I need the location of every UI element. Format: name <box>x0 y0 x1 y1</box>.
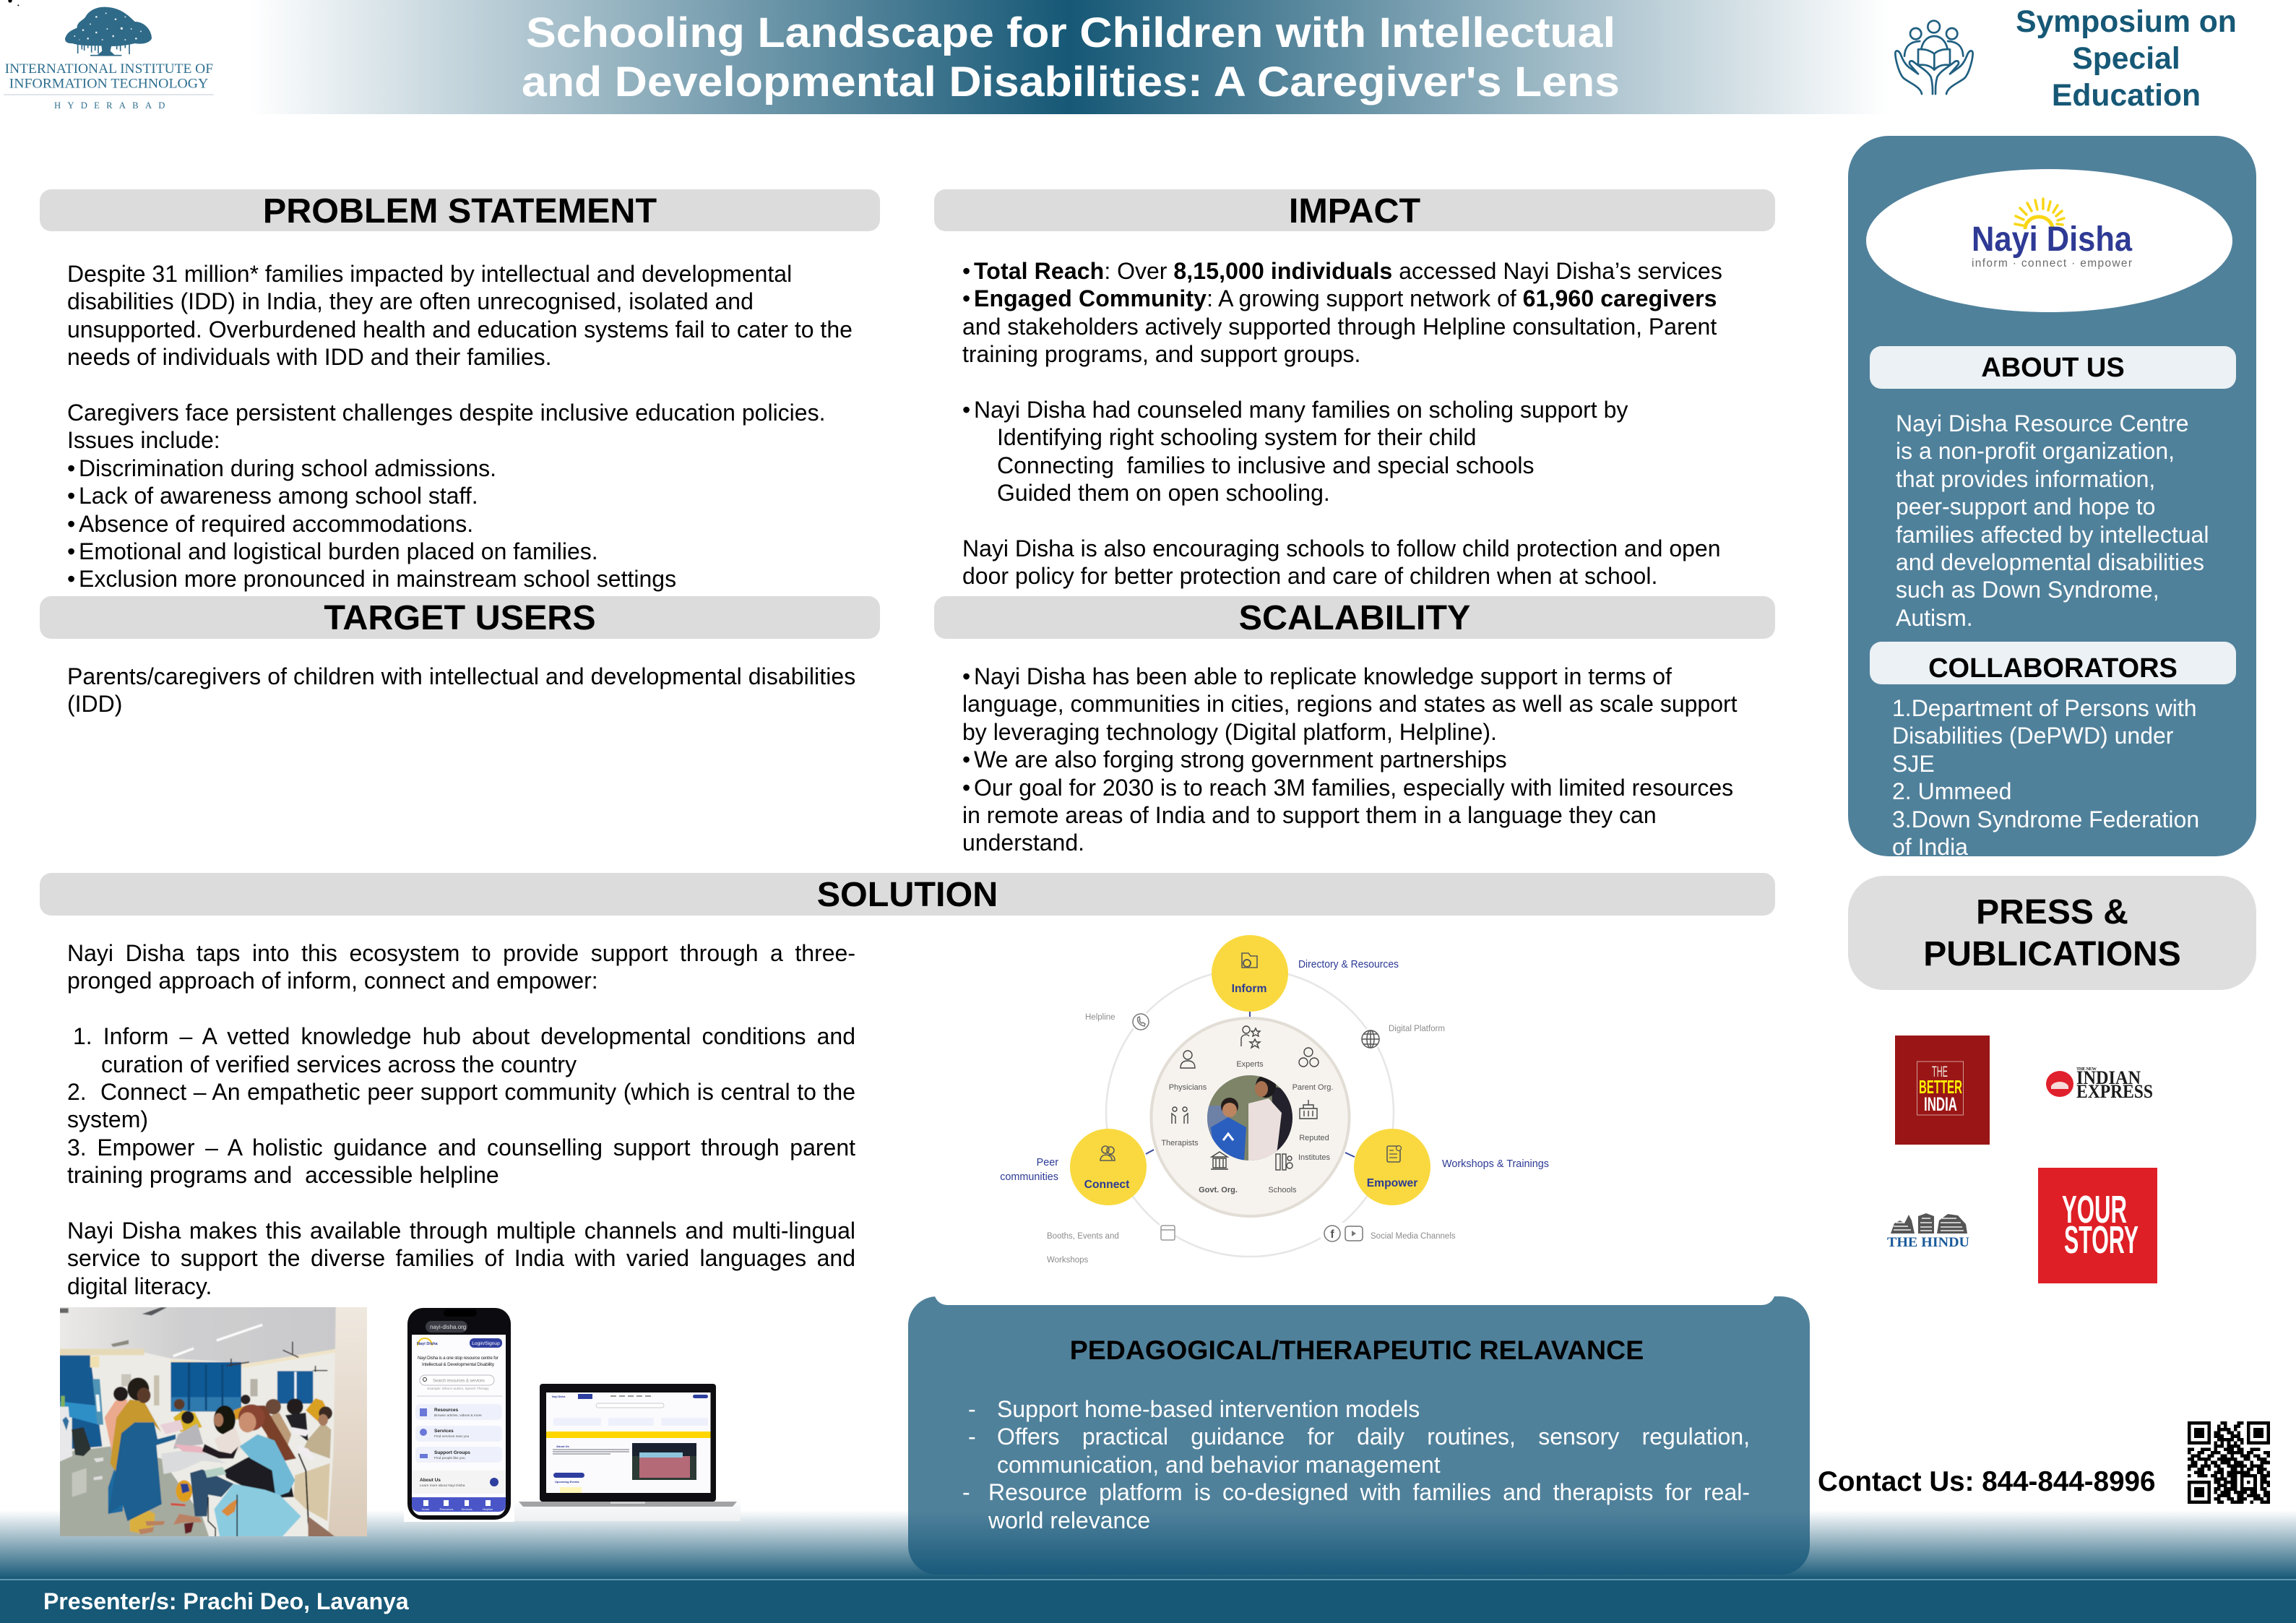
text: problem statement: • <box>67 455 75 481</box>
labels: inner stakeholders: Experts <box>1236 1060 1264 1069</box>
labels: inner stakeholders: Parent Org. <box>1292 1083 1333 1092</box>
mockup: phone: Nayi Disha <box>417 1342 438 1346</box>
text: about us: that provides information, <box>1896 466 2155 492</box>
text: collaborators: 1.Department of Persons with <box>1892 695 2197 721</box>
contact line: Contact Us: 844-844-8996 <box>1818 1466 2155 1497</box>
heading: target users <box>40 596 880 639</box>
labels: node captions <box>1000 959 1549 1183</box>
title <box>522 9 1620 106</box>
labels: inner stakeholders: Therapists <box>1161 1139 1199 1148</box>
text: impact: • <box>962 397 970 423</box>
text: problem statement: • <box>67 511 75 537</box>
text: problem statement: Discrimination during school admissions. <box>79 455 496 481</box>
logo: the better india: INDIA <box>1924 1093 1957 1115</box>
logo: Nayi Disha: Nayi Disha <box>1972 220 2132 259</box>
text: scalability: We are also forging strong government partnerships <box>974 746 1507 772</box>
text: collaborators: SJE <box>1892 751 1935 777</box>
mockup: laptop: Nayi Disha <box>552 1395 566 1398</box>
text: scalability: language, communities in cities, regions and states as well as scale support <box>962 691 1738 717</box>
panel: press and publications <box>1848 876 2256 990</box>
heading: scalability: SCALABILITY <box>1239 598 1470 637</box>
labels: node captions: communities <box>1000 1171 1058 1183</box>
text: target users: Parents/caregivers of children with intellectual and developmental disabilities <box>67 663 855 689</box>
heading: problem statement: PROBLEM STATEMENT <box>263 191 657 231</box>
text: pedagogical bullets: world relevance <box>988 1507 1150 1533</box>
labels: outer channels: Booths, Events and <box>1047 1232 1119 1241</box>
text: problem statement: Absence of required accommodations. <box>79 511 473 537</box>
text: problem statement: Lack of awareness among school staff. <box>79 483 478 509</box>
text: solution: 3. Empower – A holistic guidance and counselling support through parent <box>67 1135 855 1161</box>
panel: pedagogical relevance <box>908 1296 1810 1575</box>
text: problem statement: • <box>67 566 75 592</box>
mockup: phone: Find people like you <box>434 1456 465 1460</box>
mockup: phone: Support Groups <box>434 1450 470 1455</box>
labels: inner stakeholders <box>1161 1060 1333 1194</box>
mockup: phone: About Us <box>420 1478 441 1483</box>
logo: the better india: THE <box>1932 1064 1948 1080</box>
text: impact: door policy for better protection and care of children when at school. <box>962 563 1657 589</box>
mockup: phone: Find services near you <box>434 1434 470 1439</box>
text: about us: such as Down Syndrome, <box>1896 577 2159 603</box>
text: pedagogical bullets: - <box>962 1479 970 1505</box>
mockup: phone: Intellectual & Developmental Disability <box>422 1362 495 1367</box>
photo: child and caregiver <box>1207 1075 1293 1161</box>
text: pedagogical bullets: Offers practical guidance for daily routines, sensory regulation, <box>997 1424 1750 1450</box>
mockup: phone: Learn more about Nayi Disha <box>420 1484 465 1488</box>
text: about us <box>1896 410 2209 631</box>
logo: IIIT Hyderabad: HYDERABAD <box>54 100 165 111</box>
text: about us: Autism. <box>1896 605 1973 631</box>
mockup: phone: Browse articles, videos & more <box>434 1413 482 1418</box>
mockup: phone: Login/Signup <box>472 1341 500 1346</box>
labels: node captions: Peer <box>1037 1157 1058 1168</box>
text: impact: • <box>962 285 970 311</box>
mockup: laptop <box>519 1384 737 1507</box>
labels: inner stakeholders: Institutes <box>1298 1153 1331 1162</box>
text: solution: pronged approach of inform, connect and empower: <box>67 968 598 994</box>
mockup backdrop: laptop area <box>514 1373 741 1521</box>
text: problem statement: disabilities (IDD) in India, they are often unrecognised, isolated and <box>67 288 754 314</box>
heading: collaborators <box>1870 642 2236 684</box>
text: pedagogical bullets: Support home-based intervention models <box>997 1396 1420 1422</box>
mockup: phone: Services <box>461 1507 472 1511</box>
symposium label <box>2016 4 2237 113</box>
labels: node captions: Workshops & Trainings <box>1442 1158 1549 1170</box>
node: inform: Inform <box>1232 983 1266 995</box>
logo: new indian express: THE NEW <box>2076 1067 2097 1072</box>
logo: IIIT Hyderabad <box>4 0 214 111</box>
text: impact: Engaged Community: A growing support network of 61,960 caregivers <box>974 285 1717 311</box>
title: Schooling Landscape for Children with Intellectual <box>526 9 1615 56</box>
text: solution: 2. Connect – An empathetic peer support community (which is central to the <box>67 1079 855 1105</box>
logo oval <box>1866 169 2232 312</box>
title: and Developmental Disabilities: A Caregiver's Lens <box>522 59 1620 106</box>
text: pedagogical bullets: communication, and behavior management <box>997 1452 1441 1478</box>
text: collaborators: 3.Down Syndrome Federation <box>1892 806 2199 832</box>
mockup: phone: Services <box>434 1429 454 1434</box>
panel: about us <box>1848 136 2256 856</box>
heading: pedagogical relevance: PEDAGOGICAL/THERAPEUTIC RELAVANCE <box>1070 1335 1644 1365</box>
heading: target users: TARGET USERS <box>324 598 596 637</box>
mockup: phone: Resources <box>439 1507 454 1511</box>
footer bar <box>0 1579 2296 1623</box>
mockup: laptop: About Us <box>556 1445 570 1448</box>
text: pedagogical bullets: Resource platform is co-designed with families and therapists for real- <box>988 1479 1750 1505</box>
node: empower <box>1354 1129 1430 1205</box>
text: impact: Identifying right schooling system for their child <box>997 424 1476 450</box>
symposium label: Symposium on <box>2016 4 2237 39</box>
text: target users: (IDD) <box>67 691 122 717</box>
logo: Nayi Disha: inform · connect · empower <box>1972 257 2132 270</box>
text: problem statement: • <box>67 538 75 564</box>
mockup: phone: nayi-disha.org <box>430 1324 466 1330</box>
heading: scalability <box>934 596 1775 639</box>
text: impact <box>962 258 1722 589</box>
labels: inner stakeholders: Physicians <box>1169 1083 1207 1092</box>
node: connect: Connect <box>1084 1179 1130 1191</box>
text: solution: digital literacy. <box>67 1273 212 1299</box>
text: problem statement: Exclusion more pronounced in mainstream school settings <box>79 566 676 592</box>
mockup: phone <box>404 1308 514 1522</box>
text: impact: Connecting families to inclusive and special schools <box>997 452 1535 478</box>
text: problem statement: Issues include: <box>67 427 220 453</box>
text: scalability: Nayi Disha has been able to replicate knowledge support in terms of <box>974 663 1672 689</box>
logo: IIIT Hyderabad: INTERNATIONAL INSTITUTE OF <box>5 61 213 77</box>
text: impact: Nayi Disha is also encouraging schools to follow child protection and open <box>962 535 1721 561</box>
text: scalability: • <box>962 775 970 801</box>
node: inform <box>1212 935 1288 1012</box>
heading: solution: SOLUTION <box>817 875 998 914</box>
mockup: phone: Nayi Disha is a one stop resource centre for <box>418 1356 499 1361</box>
text: about us: families affected by intellectual <box>1896 522 2209 548</box>
labels: outer channels: Social Media Channels <box>1371 1232 1456 1241</box>
symposium label: Special <box>2072 41 2180 76</box>
icons: inner stakeholders <box>1172 1026 1319 1170</box>
labels: outer channels: Digital Platform <box>1389 1025 1445 1033</box>
text: impact: Guided them on open schooling. <box>997 480 1330 506</box>
heading: about us <box>1870 346 2236 389</box>
text: problem statement <box>67 261 853 592</box>
header title band <box>249 0 1889 114</box>
text: impact: and stakeholders actively supported through Helpline consultation, Parent <box>962 314 1717 340</box>
logo: your story: STORY <box>2064 1218 2139 1262</box>
logo: IIIT Hyderabad: INFORMATION TECHNOLOGY <box>9 77 208 92</box>
text: impact: Nayi Disha had counseled many families on scholing support by <box>974 397 1628 423</box>
text: solution: Nayi Disha makes this available through multiple channels and multi-lingual <box>67 1218 855 1244</box>
text: about us: Nayi Disha Resource Centre <box>1896 410 2189 436</box>
labels: outer channels: Helpline <box>1085 1013 1115 1022</box>
heading: impact <box>934 189 1775 231</box>
text: scalability <box>962 663 1738 856</box>
text: solution: Nayi Disha taps into this ecosystem to provide support through a three- <box>67 940 855 966</box>
logo: the hindu <box>1887 1213 1969 1250</box>
text: solution: 1. Inform – A vetted knowledge hub about developmental conditions and <box>73 1023 855 1049</box>
logo: the hindu: THE HINDU <box>1887 1235 1969 1250</box>
text: problem statement: • <box>67 483 75 509</box>
mockup: phone: Home <box>422 1507 430 1511</box>
photo: caregiver training session <box>60 1307 367 1536</box>
labels: node captions: Directory & Resources <box>1298 959 1399 970</box>
icons: outer channels <box>1131 1012 1381 1244</box>
node: connect <box>1070 1129 1147 1205</box>
text: problem statement: unsupported. Overburdened health and education systems fail to cater to the <box>67 317 853 343</box>
logo: Nayi Disha <box>1972 197 2133 270</box>
text: problem statement: Caregivers face persistent challenges despite inclusive education policies. <box>67 400 825 426</box>
text: pedagogical bullets <box>962 1396 1750 1533</box>
labels: outer channels: Workshops <box>1047 1256 1089 1265</box>
logo: your story <box>2038 1168 2157 1283</box>
logo: the better india <box>1895 1036 1990 1145</box>
diagram: inform connect empower <box>935 935 1774 1305</box>
text: target users <box>67 663 855 717</box>
presenter line: Presenter/s: Prachi Deo, Lavanya <box>43 1588 409 1614</box>
logo: new indian express: EXPRESS <box>2076 1081 2153 1102</box>
icons: outer channels: f <box>1330 1228 1334 1241</box>
icon: hands holding book with people <box>1894 20 1974 95</box>
mockup: phone: Search resources & services <box>433 1379 485 1383</box>
text: impact: training programs, and support groups. <box>962 341 1360 367</box>
text: collaborators: 2. Ummeed <box>1892 778 2011 804</box>
text: pedagogical bullets: - <box>968 1424 976 1450</box>
text: about us: and developmental disabilities <box>1896 549 2204 575</box>
text: scalability: • <box>962 746 970 772</box>
text: about us: is a non-profit organization, <box>1896 438 2175 464</box>
heading: impact: IMPACT <box>1289 191 1420 231</box>
panel: press and publications: PRESS & <box>1976 893 2128 931</box>
text: collaborators: Disabilities (DePWD) under <box>1892 723 2173 749</box>
text: problem statement: Despite 31 million* families impacted by intellectual and developmental <box>67 261 792 287</box>
logo: your story: YOUR <box>2062 1188 2127 1231</box>
text: scalability: Our goal for 2030 is to reach 3M families, especially with limited resources <box>974 775 1733 801</box>
text: impact: • <box>962 258 970 284</box>
text: about us: peer-support and hope to <box>1896 494 2155 520</box>
text: pedagogical bullets: - <box>968 1396 976 1422</box>
text: solution <box>67 940 855 1299</box>
bottom gradient band <box>0 1510 2296 1623</box>
text: scalability: understand. <box>962 830 1084 856</box>
labels: inner stakeholders: Reputed <box>1299 1134 1329 1142</box>
text: problem statement: Emotional and logistical burden placed on families. <box>79 538 598 564</box>
text: scalability: in remote areas of India and to support them in a language they can <box>962 802 1657 828</box>
heading: about us: ABOUT US <box>1981 353 2125 383</box>
text: solution: service to support the diverse families of India with varied languages and <box>67 1245 855 1271</box>
heading: solution <box>40 873 1775 916</box>
text: solution: system) <box>67 1106 148 1132</box>
text: impact: Total Reach: Over 8,15,000 individuals accessed Nayi Disha’s services <box>974 258 1722 284</box>
labels: inner stakeholders: Schools <box>1268 1186 1297 1194</box>
mockup: phone: Resources <box>434 1408 459 1413</box>
labels: outer channels <box>1047 1013 1456 1265</box>
logo: new indian express <box>2046 1067 2153 1102</box>
symposium label: Education <box>2052 78 2201 113</box>
text: solution: training programs and accessible helpline <box>67 1162 499 1188</box>
QR code <box>2188 1421 2270 1504</box>
heading: problem statement <box>40 189 880 231</box>
panel: press and publications: PUBLICATIONS <box>1923 935 2181 973</box>
mockup: phone: Helpline <box>483 1507 493 1511</box>
heading: collaborators: COLLABORATORS <box>1928 653 2178 684</box>
labels: inner stakeholders: Govt. Org. <box>1199 1186 1238 1194</box>
text: collaborators <box>1892 695 2199 856</box>
text: scalability: • <box>962 663 970 689</box>
text: solution: curation of verified services across the country <box>101 1051 577 1077</box>
text: problem statement: needs of individuals with IDD and their families. <box>67 344 552 370</box>
mockup: laptop: Upcoming Events <box>555 1480 580 1484</box>
mockup: phone: Example: What is autism, Speech Therapy <box>428 1387 489 1390</box>
text: scalability: by leveraging technology (Digital platform, Helpline). <box>962 719 1497 745</box>
node: empower: Empower <box>1367 1177 1417 1189</box>
logo: new indian express: INDIAN <box>2076 1067 2141 1088</box>
logo: the better india: BETTER <box>1919 1076 1962 1098</box>
